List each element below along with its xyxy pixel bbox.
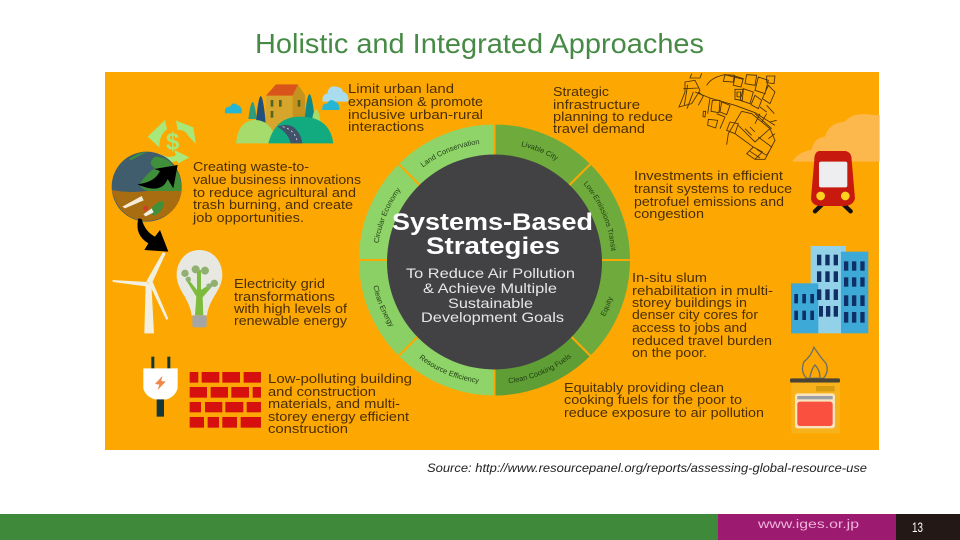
text: land: expansion & promote: [348, 95, 483, 109]
text: cooking fuels: [564, 381, 764, 420]
text: building materials: materials, and multi-: [268, 397, 400, 411]
icon: bricks: [190, 372, 261, 428]
segment labels: Livable City: [522, 141, 558, 161]
icon: globe: [112, 152, 182, 222]
footer bar: [0, 514, 960, 540]
text: slum rehabilitation: storey buildings in: [632, 296, 747, 310]
segment labels: Clean Cooking Fuels: [508, 354, 571, 383]
text: transit: Investments in efficient: [634, 169, 784, 183]
ring segments: [358, 124, 631, 396]
icon: plug: [143, 357, 178, 417]
text: cooking fuels: Equitably providing clean: [564, 381, 724, 395]
text: building materials: Low-polluting building: [268, 372, 412, 386]
panel: orange infographic: [105, 72, 880, 450]
text: waste to value: value business innovations: [193, 173, 361, 187]
text: waste to value: [192, 160, 361, 225]
icon: buildings: [791, 246, 868, 333]
icon: light bulb: [177, 250, 222, 327]
text: electricity grid: renewable energy: [234, 314, 348, 328]
icon: street map: [679, 73, 777, 159]
segment labels: Clean Energy: [374, 286, 394, 326]
text: land: Limit urban land: [348, 82, 454, 96]
icon: wind turbine: [112, 252, 168, 333]
arrow: globe to turbine: [137, 218, 168, 252]
text: land: inclusive urban-rural: [348, 108, 483, 122]
icon: cooking stove: [790, 347, 840, 433]
text: transit: [634, 169, 792, 221]
text: infrastructure: travel demand: [553, 122, 645, 136]
text: infrastructure: [553, 85, 673, 136]
center subheading: To Reduce Air Pollution: [406, 265, 575, 281]
segment labels: Land Conservation: [420, 140, 480, 168]
icon: cloud: [792, 114, 880, 162]
text: transit: congestion: [634, 207, 704, 221]
icon: recycling dollar: [148, 120, 196, 163]
text: slum rehabilitation: rehabilitation in multi-: [632, 284, 773, 298]
text: slum rehabilitation: reduced travel burden: [632, 334, 772, 348]
segment labels: Equity: [600, 296, 614, 316]
center heading: Strategies: [426, 233, 560, 260]
text: waste to value: to reduce agricultural and: [193, 186, 356, 200]
segment labels: Circular Economy: [374, 188, 400, 243]
text: building materials: [268, 372, 412, 436]
text: slum rehabilitation: denser city cores for: [632, 308, 758, 322]
center subheading: Sustainable: [448, 295, 533, 311]
text: infrastructure: Strategic: [553, 85, 609, 99]
center heading: Systems-Based: [392, 209, 593, 236]
center wheel: [359, 124, 630, 396]
text: building materials: and construction: [268, 385, 376, 399]
text: infrastructure: planning to reduce: [553, 110, 673, 124]
text: land: interactions: [348, 120, 424, 134]
text: building materials: construction: [268, 422, 348, 436]
text: slum rehabilitation: In-situ slum: [632, 271, 707, 285]
text: cooking fuels: cooking fuels for the poor to: [564, 393, 742, 407]
text: slum rehabilitation: [632, 271, 773, 360]
center subheading: [406, 265, 575, 325]
text: electricity grid: [233, 277, 348, 328]
segment labels: Low-Emissions Transit: [584, 181, 616, 252]
icon: recycling dollar: $: [166, 128, 179, 155]
page number: 13: [912, 520, 923, 535]
center subheading: & Achieve Multiple: [423, 280, 557, 296]
title: Holistic and Integrated Approaches: [255, 28, 704, 59]
text: infrastructure: infrastructure: [553, 98, 640, 112]
dark center disc: [387, 154, 602, 370]
text: electricity grid: with high levels of: [233, 302, 348, 316]
text: waste to value: job opportunities.: [192, 211, 304, 225]
text: transit: transit systems to reduce: [634, 182, 792, 196]
text: waste to value: trash burning, and create: [193, 198, 353, 212]
website address: www.iges.or.jp: [757, 519, 859, 531]
segment labels: [374, 140, 616, 384]
text: building materials: storey energy efficient: [268, 410, 410, 424]
icon: train: [811, 151, 855, 211]
source caption: Source: http://www.resourcepanel.org/reports/assessing-global-resource-use: [427, 461, 867, 475]
text: waste to value: Creating waste-to-: [193, 160, 309, 174]
text: cooking fuels: reduce exposure to air pollution: [564, 406, 764, 420]
text: electricity grid: transformations: [234, 290, 335, 304]
text: slum rehabilitation: on the poor.: [632, 346, 707, 360]
text: land: [348, 82, 483, 134]
text: electricity grid: Electricity grid: [234, 277, 325, 291]
center heading: [392, 209, 593, 260]
center subheading: Development Goals: [421, 309, 564, 325]
segment labels: Resource Efficiency: [419, 354, 479, 384]
icon: landscape with house: [225, 84, 348, 143]
text: transit: petrofuel emissions and: [634, 195, 784, 209]
arrow: globe to recycling: [137, 165, 178, 189]
text: slum rehabilitation: access to jobs and: [632, 321, 747, 335]
